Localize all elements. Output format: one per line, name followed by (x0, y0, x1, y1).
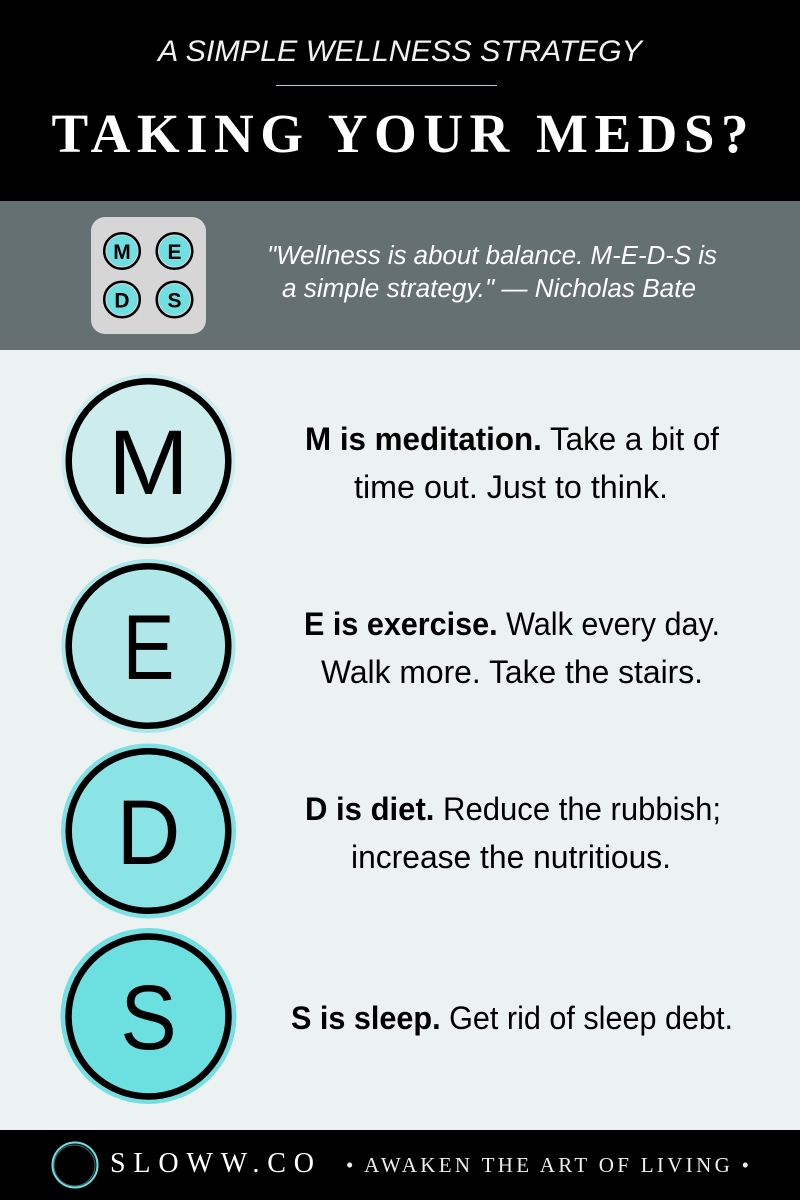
text: D is diet: increase the nutritious. (351, 839, 671, 875)
circle E (62, 559, 236, 733)
subtitle: A SIMPLE WELLNESS STRATEGY (156, 35, 644, 68)
header banner (0, 0, 800, 201)
quote text: a simple strategy." — Nicholas Bate (282, 275, 696, 303)
text: D is diet: D is diet. Reduce the rubbish; (305, 791, 721, 827)
circle E: E (122, 597, 174, 699)
circle D: D (116, 782, 180, 884)
icon: pill pack (91, 217, 206, 334)
circle M: M (108, 412, 189, 514)
circle D (61, 744, 236, 918)
circle S (60, 928, 236, 1104)
icon: pill pack: M (113, 241, 131, 264)
icon: logo ring (52, 1142, 98, 1188)
text: D is diet (305, 791, 721, 875)
quote band (0, 201, 800, 350)
icon: pill pack: S (167, 290, 182, 312)
text: S is sleep: S is sleep. Get rid of sleep debt. (291, 1000, 733, 1036)
text: E is exercise: Walk more. Take the stairs. (321, 654, 703, 690)
text: E is exercise: E is exercise. Walk every day. (304, 606, 720, 642)
quote text: "Wellness is about balance. M-E-D-S is (267, 242, 717, 270)
text: E is exercise (304, 606, 720, 690)
brand name: SLOWW.CO (110, 1148, 314, 1179)
footer bar (0, 1130, 800, 1200)
text: M is meditation (305, 421, 719, 505)
icon: pill pack: E (167, 241, 182, 264)
circle M (62, 374, 236, 548)
text: M is meditation: time out. Just to think. (354, 469, 668, 505)
text: M is meditation: M is meditation. Take a bit of (305, 421, 719, 457)
title: TAKING YOUR MEDS? (52, 103, 748, 164)
circle S: S (120, 967, 177, 1069)
icon: pill pack: D (114, 290, 130, 312)
tagline: • AWAKEN THE ART OF LIVING • (346, 1153, 749, 1177)
quote text (267, 242, 717, 303)
